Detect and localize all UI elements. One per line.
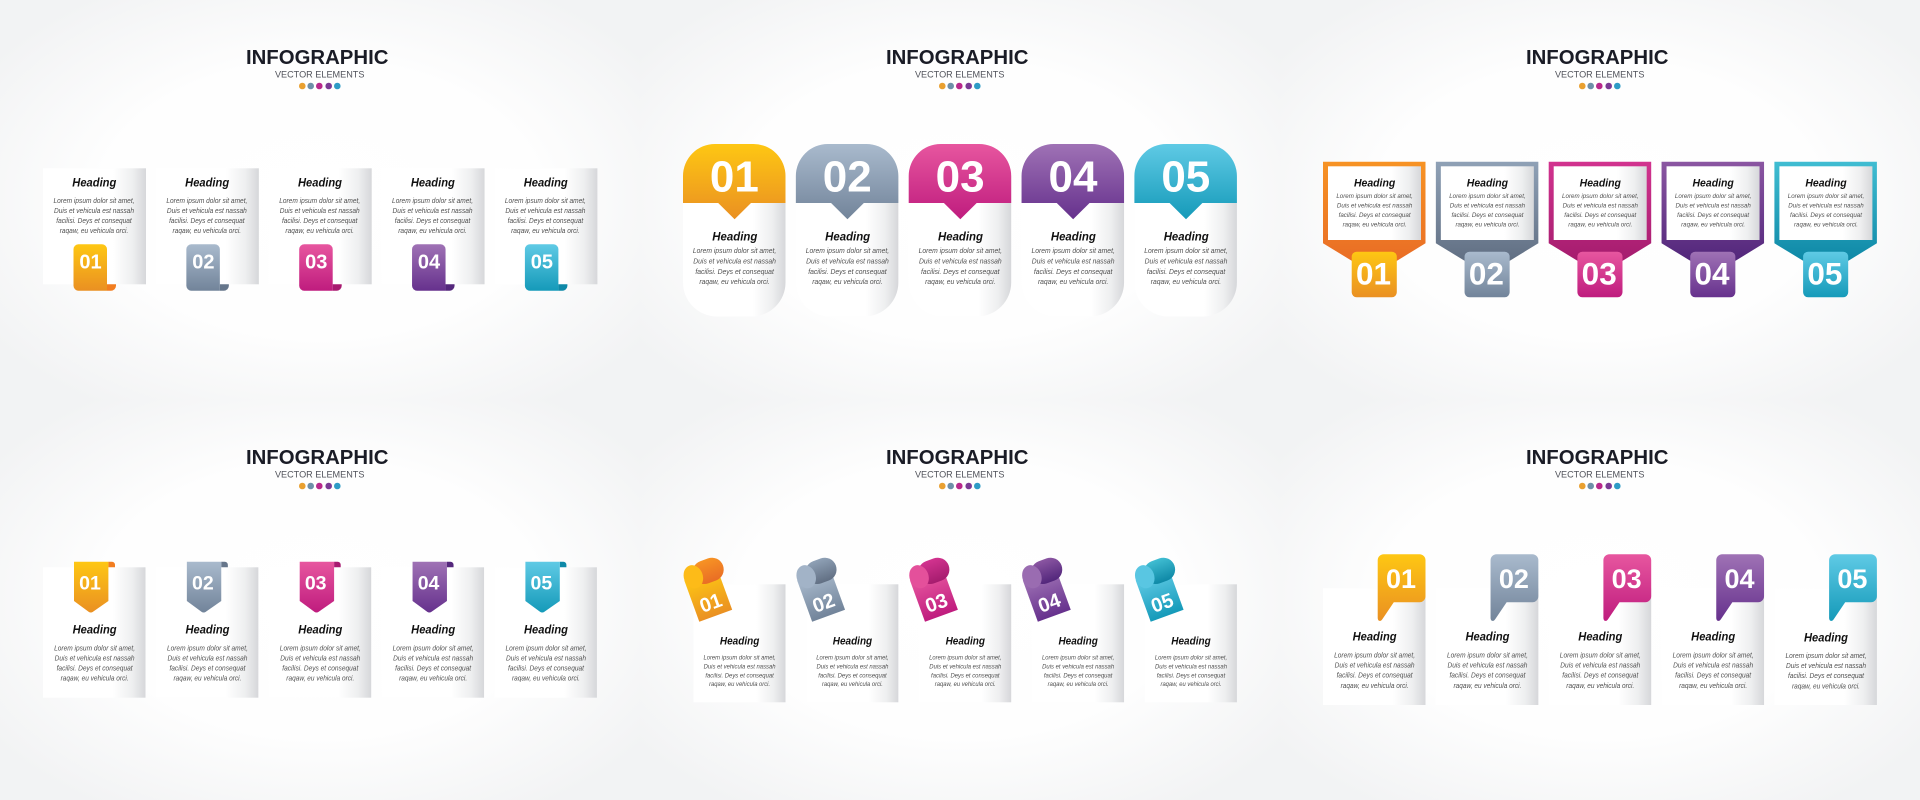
card 01 [680, 554, 786, 702]
body text: raqaw, eu vehicula orci. [1048, 681, 1109, 688]
card 04 [1662, 554, 1764, 705]
body text: Duis et vehicula est nassah [393, 656, 473, 662]
colour dots [299, 483, 341, 489]
heading: Heading [1051, 229, 1096, 243]
panel: bottom left infographic [43, 446, 597, 698]
body text: raqaw, eu vehicula orci. [1453, 683, 1522, 690]
card 02 [1436, 162, 1538, 297]
body text: Duis et vehicula est nassah [1032, 258, 1115, 266]
body text: facilisi. Deys et consequat [695, 269, 775, 276]
heading: Heading [1171, 636, 1211, 648]
body text: Lorem ipsum dolor sit amet, [1144, 248, 1228, 255]
body text: raqaw, eu vehicula orci. [1681, 221, 1745, 228]
card 03 [909, 144, 1011, 316]
heading: Heading [946, 636, 985, 648]
coloured head with pointer [796, 144, 898, 219]
heading: Heading [1058, 636, 1098, 648]
heading: Heading [72, 176, 117, 190]
body text [1560, 652, 1641, 690]
body text [919, 248, 1002, 286]
body text: Lorem ipsum dolor sit amet, [167, 646, 248, 652]
number tab 05: 05 [531, 251, 553, 273]
rolled tag 02 [793, 554, 851, 622]
body text: Duis et vehicula est nassah [929, 663, 1002, 670]
rolled tag 04: 04 [1035, 589, 1065, 618]
body text: raqaw, eu vehicula orci. [286, 676, 354, 682]
callout 05: 05 [1837, 564, 1867, 594]
body text: Lorem ipsum dolor sit amet, [1447, 652, 1528, 660]
panel heading [246, 46, 389, 89]
body text [54, 646, 135, 682]
body text: Duis et vehicula est nassah [1673, 662, 1753, 670]
card 05 [494, 168, 597, 291]
heading: Heading [1804, 630, 1849, 644]
body text: Lorem ipsum dolor sit amet, [1560, 652, 1641, 660]
body text: facilisi. Deys et consequat [1564, 212, 1637, 219]
body text: raqaw, eu vehicula orci. [512, 676, 580, 682]
rolled tag 04 [1019, 554, 1077, 622]
body text: raqaw, eu vehicula orci. [398, 228, 467, 235]
body text: raqaw, eu vehicula orci. [1038, 279, 1108, 286]
frame [1323, 162, 1426, 261]
card 03 [1549, 554, 1651, 705]
colour dots [299, 83, 341, 89]
body text: Duis et vehicula est nassah [1675, 203, 1751, 210]
heading: Heading [712, 229, 758, 243]
coloured head with pointer [683, 144, 786, 219]
callout 04 [1716, 554, 1764, 621]
panel heading [886, 446, 1029, 489]
callout 03: 03 [1612, 564, 1642, 594]
card 02 [793, 554, 898, 702]
number tile 04: 04 [1695, 256, 1730, 292]
coloured head with pointer [1022, 144, 1124, 219]
body text [1336, 193, 1413, 228]
body text: Lorem ipsum dolor sit amet, [392, 198, 473, 205]
rolled tag 03: 03 [923, 589, 951, 618]
number tab 02: 02 [192, 251, 214, 273]
rolled tag 05 [1131, 554, 1190, 622]
body text: facilisi. Deys et consequat [1147, 269, 1226, 276]
panel: bottom right infographic [1323, 446, 1877, 705]
coloured head with pointer [909, 144, 1011, 219]
heading: Heading [1353, 630, 1397, 644]
panel heading [1526, 446, 1669, 489]
colour dots [1579, 483, 1621, 489]
body text: raqaw, eu vehicula orci. [60, 228, 128, 235]
inner panel [1328, 166, 1421, 240]
body text: Duis et vehicula est nassah [1786, 663, 1866, 670]
body text: raqaw, eu vehicula orci. [925, 279, 996, 286]
body text: Lorem ipsum dolor sit amet, [1042, 654, 1114, 661]
subtitle: VECTOR ELEMENTS [275, 70, 364, 80]
heading: Heading [298, 176, 343, 190]
body text: Duis et vehicula est nassah [393, 208, 473, 215]
body text: Duis et vehicula est nassah [1335, 662, 1415, 670]
body text: Duis et vehicula est nassah [280, 208, 360, 215]
number: 01 [710, 153, 759, 202]
body text: facilisi. Deys et consequat [1337, 672, 1414, 680]
inner panel [1667, 166, 1760, 240]
subtitle: VECTOR ELEMENTS [1555, 70, 1644, 80]
heading: Heading [833, 636, 873, 648]
panel: top left infographic [43, 46, 597, 291]
body text: facilisi. Deys et consequat [1044, 672, 1113, 679]
body text [929, 654, 1002, 688]
rolled tag 03 [906, 554, 964, 622]
body text [693, 248, 776, 286]
body text: facilisi. Deys et consequat [508, 218, 584, 225]
body text: Lorem ipsum dolor sit amet, [919, 248, 1002, 255]
body text [1673, 652, 1754, 690]
heading: Heading [938, 229, 984, 243]
card 04 [1662, 162, 1764, 297]
frame [1774, 162, 1877, 261]
body text: Lorem ipsum dolor sit amet, [1562, 193, 1639, 200]
title: INFOGRAPHIC [246, 446, 389, 469]
callout 05 [1829, 554, 1877, 621]
card 04 [1019, 554, 1124, 702]
body text: facilisi. Deys et consequat [1562, 672, 1639, 680]
body text: facilisi. Deys et consequat [1451, 212, 1525, 219]
bookmark 05: 05 [531, 572, 552, 594]
heading: Heading [1805, 177, 1847, 189]
body text [1562, 193, 1639, 228]
heading: Heading [185, 176, 230, 190]
bookmark 01: 01 [79, 572, 101, 594]
body text [393, 646, 474, 682]
body text: Lorem ipsum dolor sit amet, [279, 198, 360, 205]
number tile 03: 03 [1582, 256, 1617, 292]
body text [279, 198, 360, 235]
subtitle: VECTOR ELEMENTS [915, 470, 1004, 480]
body text: Lorem ipsum dolor sit amet, [54, 198, 135, 205]
body text [1031, 248, 1115, 286]
body text: facilisi. Deys et consequat [508, 666, 585, 672]
heading: Heading [1354, 177, 1395, 189]
body text: Lorem ipsum dolor sit amet, [1336, 193, 1413, 200]
body text [1042, 654, 1115, 688]
body text: facilisi. Deys et consequat [1449, 672, 1526, 680]
body text: raqaw, eu vehicula orci. [399, 676, 467, 682]
body text [806, 248, 889, 286]
title: INFOGRAPHIC [886, 46, 1029, 69]
body text: Lorem ipsum dolor sit amet, [393, 646, 474, 652]
body text: Duis et vehicula est nassah [919, 258, 1002, 266]
body text: Lorem ipsum dolor sit amet, [505, 198, 586, 205]
body text: Lorem ipsum dolor sit amet, [693, 248, 776, 255]
body text: raqaw, eu vehicula orci. [1341, 683, 1409, 690]
card 01 [1323, 554, 1426, 705]
bookmark 02: 02 [192, 572, 214, 594]
card 01 [1323, 162, 1426, 297]
body text: Lorem ipsum dolor sit amet, [1788, 193, 1864, 200]
body text: facilisi. Deys et consequat [1788, 673, 1865, 680]
card 01 [43, 168, 146, 291]
card 03 [1549, 162, 1651, 297]
body text: Lorem ipsum dolor sit amet, [929, 654, 1001, 661]
body text: raqaw, eu vehicula orci. [1151, 279, 1221, 286]
body text: facilisi. Deys et consequat [169, 218, 246, 225]
callout 01 [1378, 554, 1426, 621]
body text: Duis et vehicula est nassah [1447, 662, 1528, 670]
body text: Lorem ipsum dolor sit amet, [1785, 653, 1867, 660]
body text: raqaw, eu vehicula orci. [1794, 221, 1858, 228]
body text: Lorem ipsum dolor sit amet, [703, 654, 776, 661]
number tile 05: 05 [1807, 256, 1842, 292]
body text [1675, 193, 1752, 228]
inner panel [1441, 166, 1534, 240]
card 05 [1774, 554, 1877, 705]
body text: Duis et vehicula est nassah [1563, 203, 1638, 210]
body text: raqaw, eu vehicula orci. [173, 676, 242, 682]
body text: Duis et vehicula est nassah [1337, 203, 1413, 210]
body text: facilisi. Deys et consequat [57, 666, 134, 672]
heading: Heading [298, 623, 343, 637]
subtitle: VECTOR ELEMENTS [275, 470, 364, 480]
title: INFOGRAPHIC [886, 446, 1029, 469]
body text: Lorem ipsum dolor sit amet, [1675, 193, 1752, 200]
body text: Duis et vehicula est nassah [167, 208, 247, 215]
body text: Duis et vehicula est nassah [816, 663, 889, 670]
body text [1144, 248, 1228, 286]
heading: Heading [524, 176, 568, 190]
body text: Lorem ipsum dolor sit amet, [280, 646, 361, 652]
subtitle: VECTOR ELEMENTS [915, 70, 1004, 80]
number: 03 [936, 153, 985, 202]
body text [1447, 652, 1528, 690]
body text [167, 646, 248, 682]
heading: Heading [1578, 630, 1623, 644]
panel heading [886, 46, 1029, 89]
rolled tag 05: 05 [1148, 589, 1177, 618]
body text: facilisi. Deys et consequat [282, 218, 358, 225]
body text: Lorem ipsum dolor sit amet, [806, 248, 889, 255]
body text [166, 198, 247, 235]
body text: raqaw, eu vehicula orci. [699, 279, 770, 286]
callout 04: 04 [1725, 564, 1755, 594]
body text: raqaw, eu vehicula orci. [1679, 683, 1747, 690]
card 05 [494, 562, 597, 698]
body text: raqaw, eu vehicula orci. [1160, 681, 1221, 688]
body text: facilisi. Deys et consequat [1034, 269, 1113, 276]
number tab 01: 01 [79, 251, 102, 273]
body text: Duis et vehicula est nassah [704, 663, 776, 670]
frame [1662, 162, 1764, 261]
body text: Lorem ipsum dolor sit amet, [1155, 654, 1227, 661]
panel: bottom centre infographic [680, 446, 1237, 702]
panel heading [1526, 46, 1669, 89]
card 05 [1131, 554, 1237, 702]
rolled tag 01: 01 [697, 589, 725, 618]
body text: facilisi. Deys et consequat [395, 218, 471, 225]
number: 05 [1161, 153, 1210, 202]
title: INFOGRAPHIC [1526, 446, 1669, 469]
inner panel [1779, 166, 1872, 240]
body text: Lorem ipsum dolor sit amet, [54, 646, 135, 652]
body text: Duis et vehicula est nassah [1042, 663, 1115, 670]
heading: Heading [720, 636, 760, 648]
heading: Heading [524, 623, 569, 637]
heading: Heading [1691, 630, 1736, 644]
body text: raqaw, eu vehicula orci. [1568, 221, 1632, 228]
number tile 01: 01 [1356, 256, 1391, 292]
body text: Lorem ipsum dolor sit amet, [505, 646, 587, 652]
body text: Duis et vehicula est nassah [693, 258, 776, 266]
heading: Heading [825, 229, 871, 243]
body text: Lorem ipsum dolor sit amet, [816, 654, 889, 661]
body text: Lorem ipsum dolor sit amet, [166, 198, 247, 205]
body text [703, 654, 776, 688]
callout 02 [1491, 554, 1538, 621]
body text: raqaw, eu vehicula orci. [935, 681, 996, 688]
frame [1436, 162, 1538, 261]
heading: Heading [1580, 177, 1621, 189]
inner panel [1554, 166, 1647, 240]
heading: Heading [185, 623, 230, 637]
body text: Duis et vehicula est nassah [1788, 203, 1864, 210]
body text: raqaw, eu vehicula orci. [511, 228, 580, 235]
number tab 03: 03 [305, 251, 327, 273]
card 04 [382, 562, 484, 698]
frame [1549, 162, 1651, 261]
card 02 [796, 144, 898, 316]
card 03 [269, 562, 371, 698]
card 02 [156, 168, 259, 291]
body text: raqaw, eu vehicula orci. [1792, 684, 1860, 691]
body text: raqaw, eu vehicula orci. [61, 676, 129, 682]
body text: Duis et vehicula est nassah [54, 208, 134, 215]
body text: facilisi. Deys et consequat [705, 672, 774, 679]
body text: raqaw, eu vehicula orci. [1343, 221, 1407, 228]
heading: Heading [1465, 630, 1510, 644]
number tile 02: 02 [1469, 256, 1504, 292]
body text [54, 198, 135, 235]
body text: Duis et vehicula est nassah [1450, 203, 1526, 210]
body text: Duis et vehicula est nassah [506, 656, 586, 662]
card 05 [1774, 162, 1877, 297]
heading: Heading [1467, 177, 1508, 189]
body text: raqaw, eu vehicula orci. [709, 681, 770, 688]
body text: facilisi. Deys et consequat [1339, 212, 1412, 219]
number tab 04: 04 [418, 251, 441, 273]
body text: raqaw, eu vehicula orci. [173, 228, 241, 235]
body text: Duis et vehicula est nassah [505, 208, 586, 215]
body text [1786, 653, 1867, 691]
body text [1334, 652, 1415, 690]
panel: top centre infographic [683, 46, 1237, 316]
body text: facilisi. Deys et consequat [1157, 672, 1226, 679]
card 02 [1436, 554, 1538, 705]
body text: raqaw, eu vehicula orci. [1455, 221, 1520, 228]
heading: Heading [73, 623, 117, 637]
colour dots [939, 83, 981, 89]
bookmark 03: 03 [305, 572, 327, 594]
body text: facilisi. Deys et consequat [818, 672, 887, 679]
body text: facilisi. Deys et consequat [169, 666, 246, 672]
body text: Lorem ipsum dolor sit amet, [1031, 248, 1115, 255]
card 02 [156, 562, 258, 698]
callout 01: 01 [1386, 564, 1416, 594]
body text: Duis et vehicula est nassah [1155, 663, 1228, 670]
card 03 [269, 168, 372, 291]
body text: raqaw, eu vehicula orci. [822, 681, 883, 688]
title: INFOGRAPHIC [246, 46, 389, 69]
heading: Heading [1164, 229, 1209, 243]
body text: Lorem ipsum dolor sit amet, [1334, 652, 1415, 660]
body text: facilisi. Deys et consequat [1677, 212, 1750, 219]
card 01 [683, 144, 786, 316]
callout 03 [1603, 554, 1651, 621]
heading: Heading [1692, 177, 1734, 189]
callout 02: 02 [1499, 564, 1529, 594]
card 05 [1134, 144, 1237, 316]
body text: Duis et vehicula est nassah [1560, 662, 1640, 670]
bookmark 04: 04 [418, 572, 440, 594]
body text [816, 654, 889, 688]
body text: Lorem ipsum dolor sit amet, [1449, 193, 1526, 200]
heading: Heading [411, 176, 455, 190]
rolled tag 02: 02 [810, 589, 838, 618]
body text: facilisi. Deys et consequat [282, 666, 359, 672]
panel heading [246, 446, 389, 489]
heading: Heading [411, 623, 456, 637]
body text: Duis et vehicula est nassah [55, 656, 135, 662]
subtitle: VECTOR ELEMENTS [1555, 470, 1644, 480]
colour dots [1579, 83, 1621, 89]
body text: raqaw, eu vehicula orci. [285, 228, 354, 235]
body text: facilisi. Deys et consequat [931, 672, 1000, 679]
body text [280, 646, 361, 682]
body text: Duis et vehicula est nassah [806, 258, 889, 266]
body text: facilisi. Deys et consequat [1790, 212, 1863, 219]
body text: facilisi. Deys et consequat [921, 269, 1001, 276]
card 01 [43, 562, 146, 698]
number: 02 [823, 153, 872, 202]
card 03 [906, 554, 1011, 702]
body text [392, 198, 473, 235]
body text [505, 198, 586, 235]
body text [1449, 193, 1526, 228]
body text [1788, 193, 1864, 228]
body text: raqaw, eu vehicula orci. [1566, 683, 1634, 690]
body text: Duis et vehicula est nassah [1145, 258, 1228, 266]
body text: facilisi. Deys et consequat [56, 218, 133, 225]
coloured head with pointer [1134, 144, 1237, 219]
body text: facilisi. Deys et consequat [395, 666, 472, 672]
panel: top right infographic [1323, 46, 1877, 297]
body text: Duis et vehicula est nassah [280, 656, 360, 662]
number: 04 [1048, 153, 1098, 202]
body text: facilisi. Deys et consequat [1675, 672, 1752, 680]
body text [1155, 654, 1228, 688]
body text: facilisi. Deys et consequat [808, 269, 888, 276]
card 04 [1022, 144, 1124, 316]
body text [506, 646, 587, 682]
title: INFOGRAPHIC [1526, 46, 1669, 69]
body text: Duis et vehicula est nassah [167, 656, 248, 662]
card 04 [382, 168, 485, 291]
body text: raqaw, eu vehicula orci. [812, 279, 883, 286]
body text: Lorem ipsum dolor sit amet, [1673, 652, 1754, 660]
colour dots [939, 483, 981, 489]
rolled tag 01 [680, 554, 738, 622]
